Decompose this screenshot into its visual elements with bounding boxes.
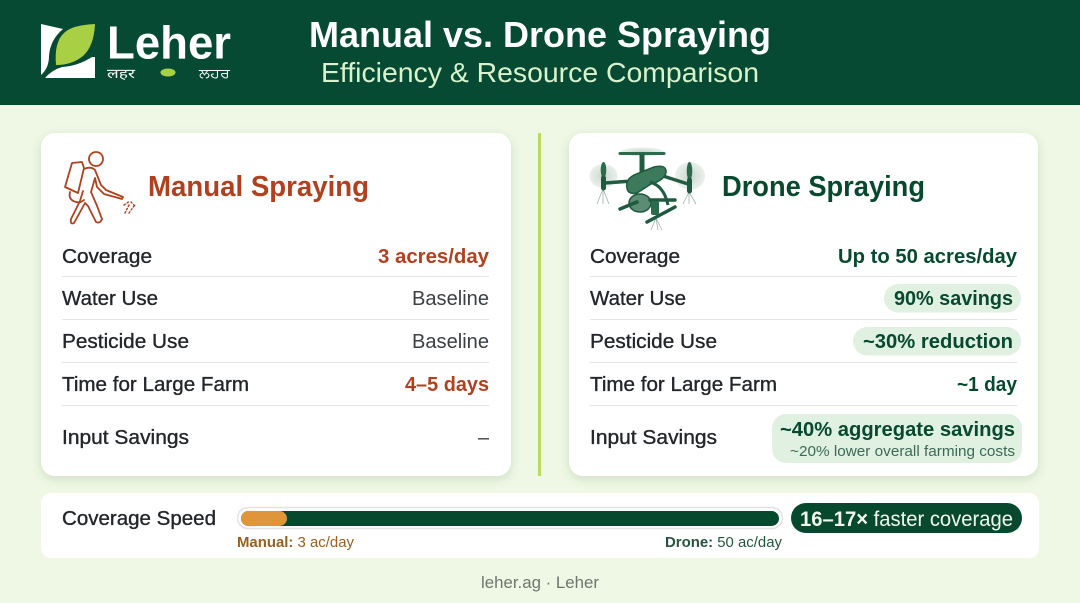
callout: aggregate savings: ~20% lower overall farming costs xyxy=(790,443,1015,460)
row: coverage xyxy=(62,246,490,268)
logo xyxy=(41,16,231,81)
row: water use: Water Use xyxy=(590,288,686,310)
bar chart: manual vs drone xyxy=(238,508,782,528)
logo: ਲਹਰ xyxy=(198,66,231,81)
row: pesticide use: Pesticide Use xyxy=(590,331,717,353)
row: water use: 90% savings xyxy=(894,288,1013,310)
row: time for large farm: Time for Large Farm xyxy=(590,374,777,396)
header band xyxy=(0,0,1080,105)
row: water use: Baseline xyxy=(412,288,489,310)
icon: person with backpack sprayer xyxy=(65,152,136,224)
label: drone rate: Drone: 50 ac/day xyxy=(665,535,783,551)
subtitle: Efficiency & Resource Comparison xyxy=(321,57,759,88)
row: input savings: – xyxy=(478,427,490,449)
label: coverage speed: Coverage Speed xyxy=(62,508,216,530)
logo: लहर xyxy=(107,66,136,81)
row: coverage: Coverage xyxy=(590,246,680,268)
row: input savings: Input Savings xyxy=(590,427,717,449)
heading: manual spraying: Manual Spraying xyxy=(148,171,369,203)
row: time for large farm: ~1 day xyxy=(957,374,1018,396)
label: manual rate: Manual: 3 ac/day xyxy=(237,535,355,551)
row: pesticide use: Baseline xyxy=(412,331,489,353)
row: pesticide use: Pesticide Use xyxy=(62,331,189,353)
icon: drone xyxy=(590,148,705,230)
row: input savings: Input Savings xyxy=(62,427,189,449)
panel: manual spraying xyxy=(41,133,511,476)
footer: leher.ag · Leher xyxy=(481,574,600,592)
row: coverage: Up to 50 acres/day xyxy=(838,246,1018,268)
row: coverage: 3 acres/day xyxy=(378,246,490,268)
badge: faster coverage: 16–17× faster coverage xyxy=(800,508,1013,531)
row: coverage xyxy=(590,246,1018,268)
row: pesticide use xyxy=(590,327,1021,356)
divider between panels xyxy=(538,133,541,476)
row: pesticide use xyxy=(62,331,489,353)
row: water use xyxy=(62,288,489,310)
row: time for large farm xyxy=(590,374,1018,396)
row: pesticide use: ~30% reduction xyxy=(863,331,1013,353)
panel: coverage speed xyxy=(41,493,1039,558)
row: time for large farm xyxy=(62,374,489,396)
row: time for large farm: 4–5 days xyxy=(405,374,489,396)
callout: aggregate savings xyxy=(772,414,1022,463)
row: water use: Water Use xyxy=(62,288,158,310)
row: time for large farm: Time for Large Farm xyxy=(62,374,249,396)
logo: Leher xyxy=(107,16,231,68)
row: coverage: Coverage xyxy=(62,246,152,268)
callout: aggregate savings: ~40% aggregate savings xyxy=(780,419,1015,441)
heading: drone spraying: Drone Spraying xyxy=(722,171,925,203)
title: Manual vs. Drone Spraying xyxy=(309,14,771,55)
row: input savings xyxy=(590,414,1022,463)
row: water use xyxy=(590,284,1021,312)
panel: drone spraying xyxy=(569,133,1038,476)
row: input savings xyxy=(62,427,490,449)
